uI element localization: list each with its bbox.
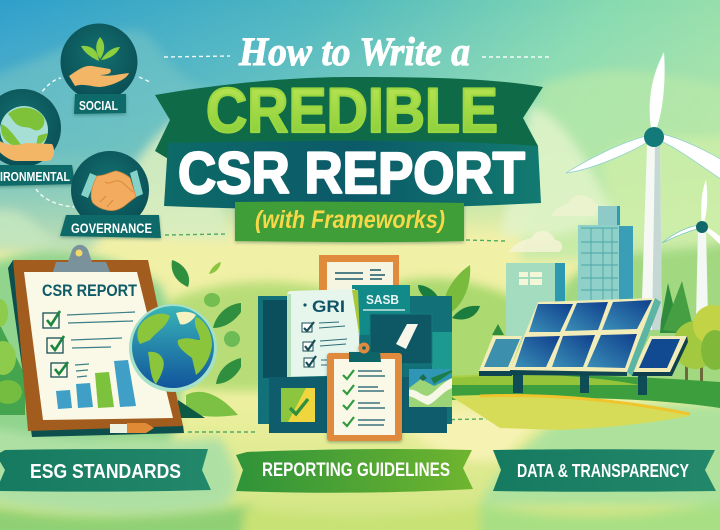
label: environmental <box>0 165 75 186</box>
label: social <box>74 94 126 114</box>
label: governance <box>60 215 161 238</box>
wind turbines <box>566 52 720 330</box>
small turbine <box>662 180 720 318</box>
tall glass building <box>578 206 633 306</box>
subtitle: with frameworks <box>235 202 464 242</box>
buildings <box>506 206 633 343</box>
bar chart <box>56 360 136 409</box>
yellow check tile <box>281 388 315 422</box>
sasb card: SASB <box>366 293 399 307</box>
large turbine <box>566 52 720 330</box>
right panel <box>632 336 688 376</box>
banner: esg standards <box>0 449 211 492</box>
trees <box>492 281 720 382</box>
icon: environmental <box>0 89 61 167</box>
banner: csr report: CSR REPORT <box>178 141 525 206</box>
icon: governance <box>71 151 149 229</box>
dark panel with check <box>370 314 432 364</box>
label: social: SOCIAL <box>79 99 118 113</box>
orange clipboard <box>327 342 402 441</box>
banner: credible <box>155 76 543 160</box>
plant <box>418 265 480 330</box>
ground with swoosh <box>450 374 720 430</box>
subtitle: with frameworks: (with Frameworks) <box>255 206 445 234</box>
sasb card <box>352 285 410 335</box>
checklist <box>43 311 135 377</box>
clipboard: csr report <box>8 245 184 437</box>
dashed connector lines <box>36 56 552 432</box>
banner: credible: CREDIBLE <box>206 76 498 146</box>
document stack: frameworks <box>258 255 480 441</box>
pencil tab <box>110 423 154 433</box>
top orange document <box>319 255 399 298</box>
left panel <box>479 336 522 376</box>
banner: data and transparency <box>493 449 716 492</box>
clip <box>53 245 110 272</box>
main panel <box>510 298 661 376</box>
low building <box>506 263 565 343</box>
label: governance: GOVERNANCE <box>71 221 152 236</box>
clouds <box>509 195 598 252</box>
folder back <box>258 296 452 433</box>
icon: social <box>60 24 138 100</box>
banner: reporting guidelines: REPORTING GUIDELINES <box>262 460 450 481</box>
banner: esg standards: ESG STANDARDS <box>30 461 181 483</box>
report heading: CSR REPORT <box>42 282 137 300</box>
gri document: GRI <box>312 297 345 316</box>
gri document <box>287 289 360 377</box>
title: how to write a: How to Write a <box>238 29 470 74</box>
solar panels <box>479 298 688 395</box>
map tile <box>409 369 452 407</box>
globe <box>129 304 217 392</box>
leaves behind clipboard <box>0 260 241 418</box>
label: environmental: IRONMENTAL <box>0 170 70 184</box>
banner: reporting guidelines <box>236 449 473 493</box>
